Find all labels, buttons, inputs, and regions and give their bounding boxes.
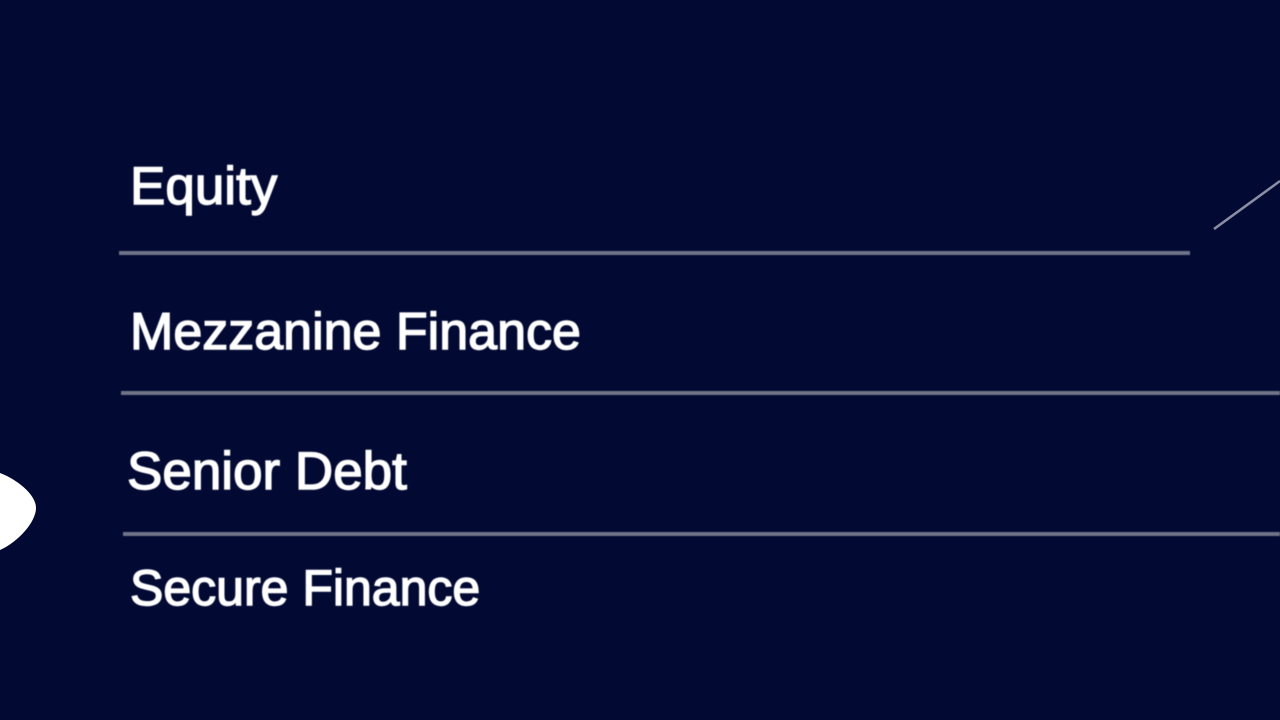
- heading: Secure Finance: Secure Finance: [130, 560, 480, 616]
- arrow: diagonal line at upper right: [1213, 180, 1280, 230]
- divider line 3: [123, 532, 1280, 536]
- heading: Mezzanine Finance: Mezzanine Finance: [130, 303, 581, 361]
- icon: white ellipse at left edge: [0, 473, 36, 550]
- heading: Equity: Equity: [130, 157, 277, 216]
- heading: Senior Debt: Senior Debt: [127, 442, 407, 501]
- divider line 1: [119, 251, 1190, 255]
- divider line 2: [121, 391, 1280, 395]
